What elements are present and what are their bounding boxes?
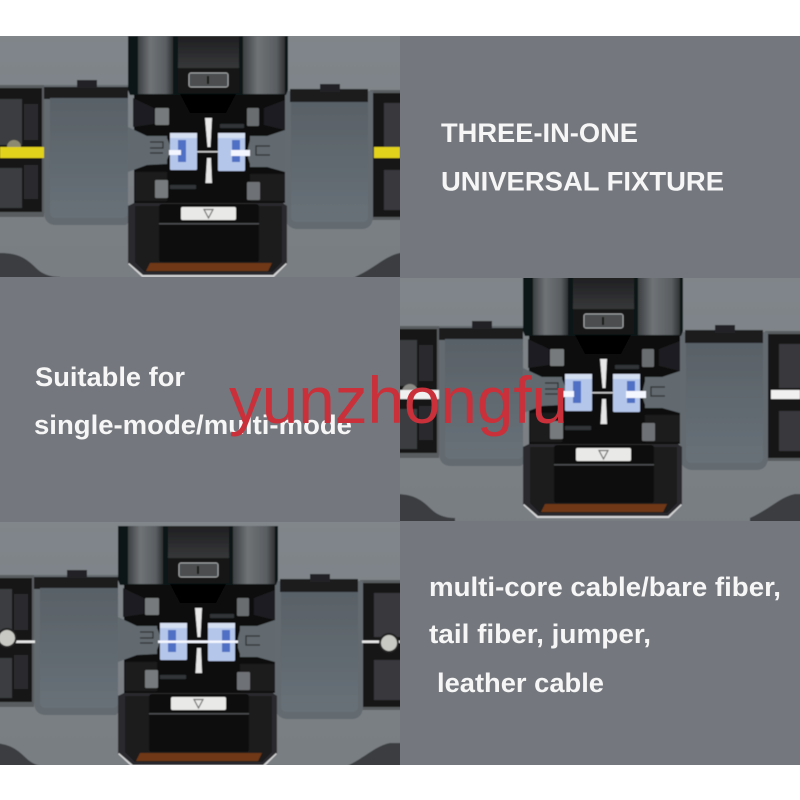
heading: three-in-one universal fixture: UNIVERSAL FIXTURE [441,166,724,196]
panel: suitable-for text background [0,277,400,522]
fixture body [0,36,400,277]
thin bare fiber [0,629,400,652]
panel: fixture photo with thin fiber [0,522,400,765]
panel: three-in-one heading background [400,36,800,278]
text block: cable types: tail fiber, jumper, [429,619,651,649]
text block: suitable for single-mode/multi-mode [34,362,352,440]
watermark: yunzhongfu: yunzhongfu [229,364,568,437]
text block: suitable for single-mode/multi-mode: Suitable for [35,362,185,392]
panel: fixture photo with yellow cable [0,36,400,277]
yellow cable [0,140,400,158]
text block: cable types [429,572,781,698]
white cable [400,384,800,400]
text block: cable types: leather cable [437,668,604,698]
panel: fixture photo with white cable [400,278,800,521]
text block: suitable for single-mode/multi-mode: single-mode/multi-mode [34,410,352,440]
heading: three-in-one universal fixture: THREE-IN-ONE [441,118,638,148]
fixture body [0,522,400,765]
text block: cable types: multi-core cable/bare fiber, [429,572,781,602]
panel: cable types text background [400,521,800,765]
heading: three-in-one universal fixture [441,118,724,196]
fixture body [400,278,800,521]
